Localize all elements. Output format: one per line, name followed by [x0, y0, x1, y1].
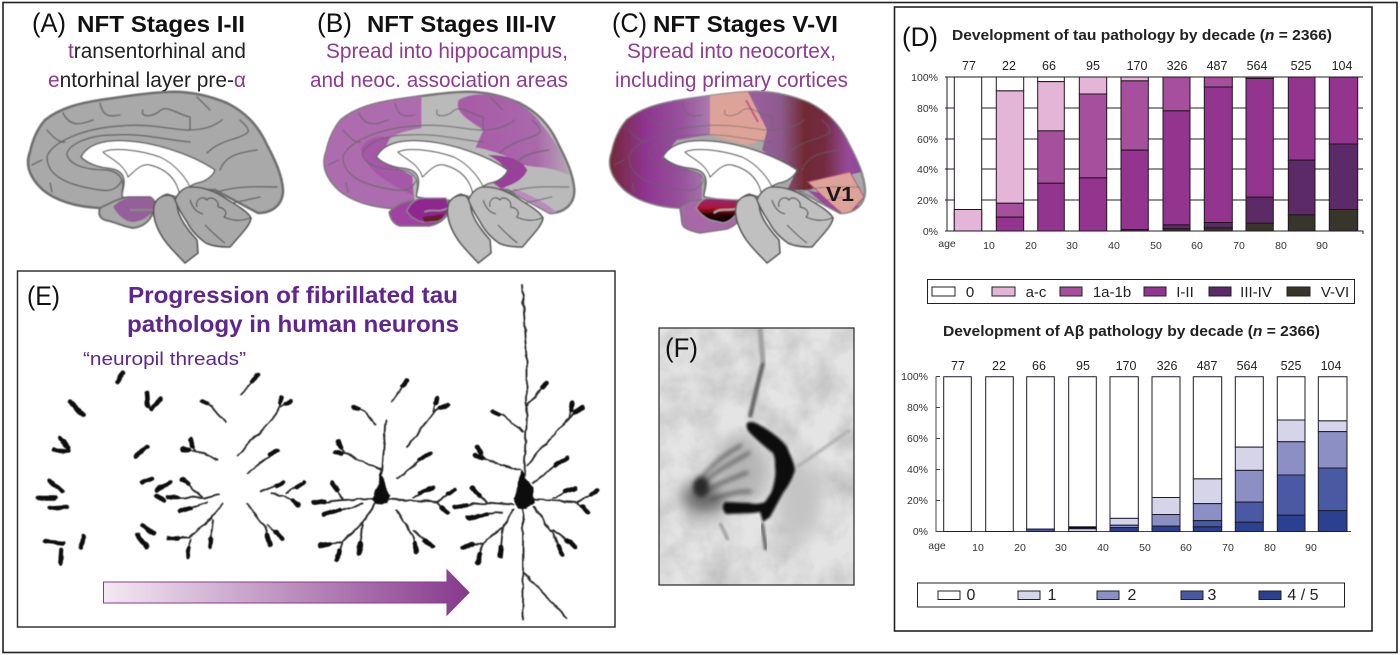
tau case counts: 95: [1086, 59, 1100, 73]
panel B description: Spread into hippocampus,: [326, 40, 568, 63]
amyloid age axis labels: [928, 540, 1317, 554]
panel F label: (F): [665, 333, 698, 363]
amyloid age axis labels: 50: [1139, 542, 1151, 554]
tau age axis labels: age: [938, 238, 956, 250]
tau legend: V-VI: [1321, 284, 1349, 301]
tau age axis labels: 40: [1108, 240, 1120, 252]
neurofibrillary tangle: [723, 422, 795, 522]
amyloid y axis labels: 100%: [901, 371, 928, 383]
entorhinal and hippocampal area: [680, 200, 743, 233]
amyloid age axis labels: 40: [1097, 542, 1109, 554]
tau legend: I-II: [1176, 284, 1194, 301]
panel B label: (B): [317, 8, 352, 38]
amyloid chart title: Development of Aβ pathology by decade ( n = 2366): [943, 324, 1320, 340]
neuron stage 1: threads: [38, 372, 170, 563]
amyloid age axis labels: 10: [972, 542, 984, 554]
tau age axis labels: [938, 238, 1328, 252]
amyloid y axis labels: [901, 371, 928, 538]
panel E frame: [18, 271, 615, 627]
panel E title: pathology in human neurons: [127, 311, 459, 337]
panel A description: entorhinal layer pre-α: [48, 69, 246, 92]
amyloid case counts: 525: [1281, 359, 1301, 373]
tau legend: 0: [966, 284, 974, 301]
tau age axis labels: 30: [1066, 240, 1078, 252]
neuron stage 2: fragmented dendrites: [168, 375, 303, 557]
amyloid legend: 3: [1208, 587, 1217, 604]
neuron stage 4: complete neuron: [455, 285, 597, 620]
neuropil threads label: “neuropil threads”: [83, 349, 246, 369]
tau stacked bar chart: [911, 59, 1363, 252]
panel C: NFT stages V-VI: [597, 8, 867, 263]
panel E label: (E): [27, 281, 60, 311]
tau age axis labels: 70: [1233, 240, 1245, 252]
amyloid age axis labels: 90: [1305, 542, 1317, 554]
amyloid stacked bar chart: [901, 359, 1351, 554]
tau case counts: 525: [1291, 59, 1311, 73]
tau y axis labels: [911, 72, 938, 238]
panel C label: (C): [612, 8, 647, 38]
panel A description: [48, 40, 246, 92]
amyloid legend: 0: [967, 587, 976, 604]
brain C: [597, 85, 867, 263]
panel B: NFT stages III-IV: [310, 8, 574, 263]
amyloid bars: [944, 377, 1347, 532]
amyloid legend: 2: [1128, 587, 1137, 604]
tau legend: [928, 280, 1354, 304]
panel B description: [310, 40, 568, 92]
amyloid age axis labels: 60: [1180, 542, 1192, 554]
amyloid case counts: 104: [1321, 359, 1341, 373]
panel A heading: NFT Stages I-II: [77, 11, 245, 37]
amyloid y axis labels: 60%: [907, 433, 928, 445]
amyloid y axis labels: 80%: [907, 402, 928, 414]
tau bars: [954, 77, 1358, 231]
tau case counts: 77: [962, 59, 976, 73]
amyloid legend: [918, 583, 1344, 607]
micrograph background: [659, 328, 854, 585]
amyloid case counts: 22: [992, 359, 1006, 373]
tau age axis labels: 60: [1191, 240, 1203, 252]
amyloid case counts: [951, 359, 1341, 373]
tau legend: III-IV: [1240, 284, 1272, 301]
tau case counts: 487: [1207, 59, 1227, 73]
panel A: NFT stages I-II: [28, 8, 283, 263]
V1 label: V1: [826, 184, 854, 206]
amyloid age axis labels: 80: [1264, 542, 1276, 554]
entorhinal highlight: [113, 197, 154, 222]
panel C description: [615, 40, 848, 92]
panel A label: (A): [32, 8, 66, 38]
tau age axis labels: 80: [1275, 240, 1287, 252]
amyloid age axis labels: age: [928, 540, 946, 552]
tau case counts: 170: [1127, 59, 1147, 73]
micrograph contents: [659, 328, 854, 585]
tau case counts: 564: [1247, 59, 1267, 73]
tau legend: a-c: [1026, 284, 1047, 301]
tau y axis labels: 80%: [917, 103, 938, 115]
amyloid legend: 1: [1048, 587, 1057, 604]
amyloid case counts: 95: [1076, 359, 1090, 373]
tau age axis labels: 50: [1150, 240, 1162, 252]
tau case counts: 22: [1002, 59, 1016, 73]
amyloid age axis labels: 20: [1014, 542, 1026, 554]
amyloid case counts: 487: [1197, 359, 1217, 373]
neuron stage 3: neuron with partial dendrites: [313, 380, 455, 560]
amyloid case counts: 326: [1157, 359, 1177, 373]
entorhinal and hippocampal area: [389, 200, 449, 226]
panel D label: (D): [902, 22, 938, 52]
amyloid y axis labels: 20%: [907, 495, 928, 507]
progression arrow: [104, 570, 469, 615]
micrograph frame: [659, 328, 854, 585]
tau legend: 1a-1b: [1093, 284, 1131, 301]
amyloid y axis labels: 40%: [907, 464, 928, 476]
panel C description: Spread into neocortex,: [627, 40, 836, 63]
soma stage 4: [513, 470, 534, 509]
brain A: [28, 92, 283, 263]
panel C heading: NFT Stages V-VI: [653, 11, 838, 37]
panel E title: [127, 282, 459, 337]
tau age axis labels: 90: [1316, 240, 1328, 252]
amyloid case counts: 170: [1116, 359, 1136, 373]
tau age axis labels: 10: [983, 240, 995, 252]
amyloid age axis labels: 30: [1055, 542, 1067, 554]
tau case counts: 104: [1332, 59, 1352, 73]
tau case counts: [962, 59, 1352, 73]
amyloid age axis labels: 70: [1222, 542, 1234, 554]
panel D: bar charts: [894, 7, 1372, 631]
panel C description: including primary cortices: [615, 69, 848, 92]
soma stage 3: [371, 470, 390, 505]
tau y axis labels: 0%: [923, 226, 938, 238]
tau y axis labels: 60%: [917, 134, 938, 146]
brain B: [312, 85, 574, 263]
amyloid case counts: 564: [1237, 359, 1257, 373]
tau age axis labels: 20: [1025, 240, 1037, 252]
panel E title: Progression of fibrillated tau: [128, 282, 458, 308]
panel A description: transentorhinal and: [68, 40, 246, 63]
tau chart title: Development of tau pathology by decade ( n = 2366): [952, 28, 1332, 44]
panel B description: and neoc. association areas: [310, 69, 568, 92]
tau y axis labels: 20%: [917, 195, 938, 207]
amyloid y axis labels: 0%: [913, 526, 928, 538]
panel F: micrograph of neuron: [659, 328, 854, 585]
amyloid case counts: 66: [1032, 359, 1046, 373]
amyloid case counts: 77: [951, 359, 965, 373]
tau y axis labels: 100%: [911, 72, 938, 84]
tau case counts: 326: [1167, 59, 1187, 73]
tau y axis labels: 40%: [917, 164, 938, 176]
panel B heading: NFT Stages III-IV: [367, 11, 557, 37]
panel D frame: [894, 7, 1372, 631]
amyloid legend: 4 / 5: [1287, 587, 1319, 604]
tau case counts: 66: [1042, 59, 1056, 73]
panel E: progression of tau pathology: [18, 271, 615, 627]
